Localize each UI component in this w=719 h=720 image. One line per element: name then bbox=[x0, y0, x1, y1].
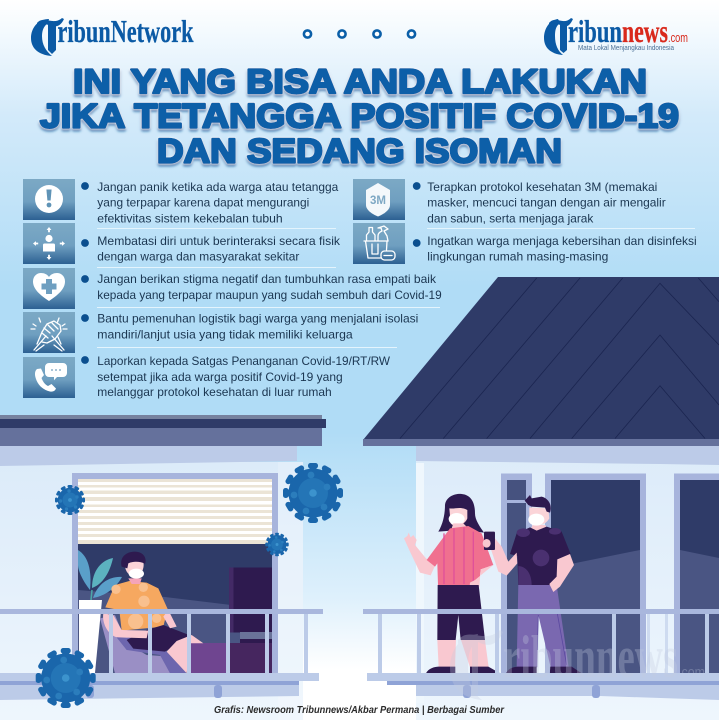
watermark bbox=[450, 624, 705, 700]
tip text: stigma: kepada yang terpapar maupun yang sudah sembuh dari Covid-19 bbox=[97, 288, 442, 302]
logo: Tribun Network bbox=[31, 13, 194, 56]
tip text: jangan panik: yang terpapar karena dapat mengurangi bbox=[97, 196, 309, 210]
cabinet and table bbox=[191, 568, 272, 673]
right balcony railing bbox=[363, 609, 719, 700]
tip text: stigma bbox=[81, 272, 442, 302]
tip icon: clasped hands bbox=[23, 312, 75, 353]
tip icon: heart bbox=[23, 268, 75, 309]
tip text: kebersihan: Ingatkan warga menjaga kebersihan dan disinfeksi bbox=[427, 234, 697, 248]
left balcony railing bbox=[0, 609, 323, 700]
pagination dots bbox=[304, 30, 415, 38]
roof bbox=[363, 277, 719, 465]
title: INI YANG BISA ANDA LAKUKAN bbox=[73, 63, 647, 101]
title: JIKA TETANGGA POSITIF COVID-19 bbox=[40, 98, 679, 136]
tip text: laporkan: melanggar protokol kesehatan di luar rumah bbox=[97, 385, 332, 399]
tip text: jangan panik bbox=[81, 180, 339, 226]
tip text: stigma: Jangan berikan stigma negatif dan tumbuhkan rasa empati baik bbox=[97, 272, 436, 286]
logo: Tribunnews: news bbox=[622, 13, 668, 49]
tip icon: 3M shield bbox=[353, 179, 405, 220]
left house bbox=[0, 415, 326, 720]
tip icon: physical distance bbox=[23, 223, 75, 264]
tip text: kebersihan: lingkungan rumah masing-masing bbox=[427, 250, 608, 264]
tip text: laporkan: Laporkan kepada Satgas Penanganan Covid-19/RT/RW bbox=[97, 354, 391, 368]
virus: large right of left window bbox=[283, 463, 343, 523]
tip icon: alert bbox=[23, 179, 75, 220]
tip icon: cleaning supplies bbox=[353, 223, 405, 264]
title: DAN SEDANG ISOMAN bbox=[157, 132, 562, 170]
tip icon: 3M shield: 3M bbox=[370, 195, 386, 207]
tip text: jangan panik: Jangan panik ketika ada warga atau tetangga bbox=[97, 180, 339, 194]
plant bbox=[78, 550, 122, 673]
logo: Tribunnews: Mata Lokal Menjangkau Indonesia bbox=[578, 45, 674, 52]
tip text: protokol 3M: dan sabun, serta menjaga jarak bbox=[427, 212, 593, 226]
logo: Tribunnews bbox=[544, 13, 688, 55]
watermark: .com bbox=[678, 664, 705, 681]
logo: Tribun Network: ribunNetwork bbox=[58, 13, 194, 49]
logo: Tribunnews: .com bbox=[668, 30, 688, 45]
window with blind and room bbox=[72, 473, 278, 673]
tip text: laporkan: setempat jika ada warga positif Covid-19 yang bbox=[97, 370, 343, 384]
tip text: membatasi diri: Membatasi diri untuk berinteraksi secara fisik bbox=[97, 234, 340, 248]
right house bbox=[363, 277, 719, 720]
logo: Tribunnews: ribun bbox=[568, 13, 622, 49]
title bbox=[40, 63, 679, 170]
tip text: protokol 3M: masker, mencuci tangan dengan air mengalir bbox=[427, 196, 666, 210]
virus: upper left bbox=[55, 485, 85, 515]
tip text: logistik: Bantu pemenuhan logistik bagi warga yang menjalani isolasi bbox=[97, 312, 418, 326]
tip text: membatasi diri bbox=[81, 234, 340, 264]
roof edge bbox=[0, 415, 326, 466]
tip icon: phone and chat bbox=[23, 357, 75, 398]
tip text: kebersihan bbox=[413, 234, 697, 264]
tip text: logistik: mandiri/lanjut usia yang tidak memiliki keluarga bbox=[97, 327, 353, 341]
person: woman in pink shirt bbox=[404, 494, 500, 673]
tip text: laporkan bbox=[81, 354, 391, 399]
virus: large lower left bbox=[36, 648, 96, 708]
tip text: protokol 3M: Terapkan protokol kesehatan 3M (memakai bbox=[427, 180, 657, 194]
windows and door bbox=[501, 474, 719, 674]
tip text: protokol 3M bbox=[413, 180, 666, 226]
virus: small at window edge bbox=[265, 533, 289, 556]
person: man in dark shirt with phone bbox=[483, 495, 582, 673]
tip text: jangan panik: efektivitas sistem kekebalan tubuh bbox=[97, 212, 283, 226]
tip text: logistik bbox=[81, 312, 418, 341]
person: man in orange shirt sitting bbox=[100, 552, 203, 673]
source credit: Grafis: Newsroom Tribunnews/Akbar Permana | Berbagai Sumber bbox=[214, 705, 505, 716]
tip text: membatasi diri: dengan warga dan masyarakat sekitar bbox=[97, 250, 299, 264]
